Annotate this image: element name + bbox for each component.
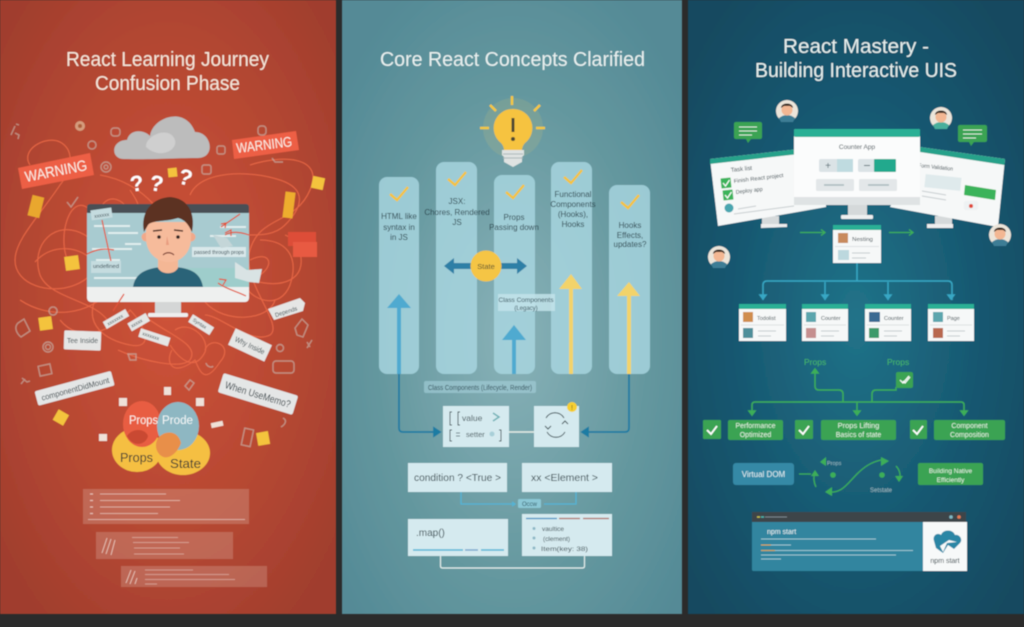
column text 4: Hooks xyxy=(562,220,584,229)
child card 3: Counter xyxy=(884,316,904,322)
sticky label 2 xyxy=(192,247,246,257)
element box: xx <Element > xyxy=(531,473,598,484)
title: react mastery: Building Interactive UIS xyxy=(755,60,957,82)
chat bubbles xyxy=(734,122,987,146)
outcome: performance: Optimized xyxy=(740,432,771,439)
code lines on screen xyxy=(92,226,246,278)
avatar top right xyxy=(930,107,952,129)
tangled red scribbles xyxy=(15,140,313,375)
outcome: props lifting: Props Lifting xyxy=(838,421,879,430)
flow lines into state box xyxy=(399,374,629,436)
label: Tee Inside: Tee Inside xyxy=(67,336,98,345)
sticky label 1: xxxxxx xyxy=(94,212,110,220)
column text 5 xyxy=(614,221,647,249)
building lists box: Efficiently xyxy=(937,477,965,484)
label: small tag 2: xxxxx xyxy=(130,318,144,329)
map box: .map() xyxy=(416,528,445,539)
props labels xyxy=(804,357,909,367)
label: small tag 3 xyxy=(138,328,171,346)
outcome: component composition: Component xyxy=(951,423,988,430)
venn diagram: props and state: Prode xyxy=(162,415,193,427)
child card 2 xyxy=(802,304,848,341)
title: concepts clarified: Core React Concepts Clarified xyxy=(380,49,645,71)
reconciliation cycle diagram xyxy=(799,457,903,496)
label: Why inside: Why Inside xyxy=(233,335,266,356)
column text 3 xyxy=(489,213,539,232)
question marks xyxy=(128,164,195,197)
column text 3: Passing down xyxy=(489,223,539,232)
title: react mastery xyxy=(755,36,957,82)
scattered icons xyxy=(11,121,312,447)
child card 2: Counter xyxy=(821,316,841,322)
column text 1: HTML like xyxy=(381,212,417,221)
label: small tag 4 xyxy=(188,314,214,335)
code block 3 xyxy=(121,566,267,587)
outcome: props lifting xyxy=(795,420,896,440)
npm start logo card: npm start xyxy=(930,558,960,565)
parent component card xyxy=(833,225,881,263)
avatar top left xyxy=(776,100,798,122)
label: small tag 1: xxxxxxx xyxy=(106,313,125,327)
center app window: counter app: + xyxy=(825,161,831,172)
list box: Item(key: 38) xyxy=(541,546,588,553)
small venn tags xyxy=(99,387,223,441)
panel: react mastery xyxy=(688,0,1024,614)
venn diagram: props and state xyxy=(112,401,210,475)
label: Tee Inside xyxy=(64,330,101,351)
concept columns xyxy=(379,162,650,374)
terminal: npm start xyxy=(752,512,966,571)
props labels: Props xyxy=(804,357,826,367)
component tree connectors xyxy=(760,263,954,300)
class components caption xyxy=(424,381,536,393)
npm start logo card xyxy=(923,522,967,571)
virtual dom box: Virtual DOM xyxy=(742,470,786,479)
chat bubble left xyxy=(734,122,762,143)
map box xyxy=(408,519,508,556)
left app window: task list xyxy=(710,146,826,228)
column text 1 xyxy=(381,212,417,242)
label: componentDidMount: componentDidMount xyxy=(40,376,111,403)
building lists box xyxy=(918,463,983,485)
child card 4 xyxy=(928,304,974,341)
icon: cloud xyxy=(114,117,210,159)
center app window: counter app: Counter App xyxy=(839,144,875,151)
red note right xyxy=(288,232,317,257)
warning sign left: WARNING xyxy=(24,157,89,186)
warning sign right: WARNING xyxy=(235,133,293,156)
right app window: notifications xyxy=(890,147,1005,228)
label: When UseMemo: When UseMemo? xyxy=(223,380,292,411)
useState box xyxy=(443,406,509,447)
confusion labels xyxy=(35,298,305,415)
column text 5: updates? xyxy=(614,240,647,249)
connector between boxes xyxy=(509,431,534,433)
avatar right xyxy=(989,224,1011,246)
column text 4: (Hooks), xyxy=(558,210,588,219)
column text 5: Hooks xyxy=(619,221,641,230)
question marks: ? xyxy=(128,170,145,197)
column text 2: JS xyxy=(452,218,462,227)
child card 1 xyxy=(739,304,786,341)
virtual dom box xyxy=(733,463,794,485)
list box xyxy=(522,514,612,556)
code block 1 xyxy=(83,489,249,524)
or label: Occw xyxy=(522,502,538,508)
panel: confusion phase xyxy=(0,0,336,614)
yellow sticky notes xyxy=(28,167,325,446)
list box: (clement) xyxy=(543,536,570,543)
props flow lines xyxy=(749,369,967,415)
outcome: component composition xyxy=(910,420,1005,440)
class components label: Class Components xyxy=(499,297,554,304)
title: confusion phase xyxy=(66,49,269,95)
question marks: ? xyxy=(176,164,195,191)
sticky label 3: undefined xyxy=(93,264,119,270)
list box: vaultice xyxy=(542,526,564,533)
terminal: npm start: npm start xyxy=(767,529,796,536)
venn diagram: props and state: Props xyxy=(120,451,153,465)
re-render cycle box xyxy=(534,402,579,447)
parent component card: Nesting xyxy=(852,237,873,243)
chat bubble right xyxy=(958,125,987,146)
outcome: props lifting: Basics of state xyxy=(836,432,881,439)
class components label: (Legacy) xyxy=(514,306,538,312)
venn diagram: props and state: State xyxy=(170,457,201,471)
paper scrap xyxy=(235,262,262,283)
building lists box: Building Native xyxy=(929,468,973,475)
column text 5: Effects, xyxy=(617,231,643,240)
title: confusion phase: Confusion Phase xyxy=(95,73,240,95)
label: small tag 1 xyxy=(103,309,129,329)
reconciliation cycle diagram: Setstate xyxy=(870,488,893,494)
bracket between map and list xyxy=(440,556,584,568)
element box xyxy=(522,463,612,492)
reconciliation cycle diagram: Props xyxy=(827,461,842,467)
sticky label 2: passed through props xyxy=(194,250,244,256)
useState box: value xyxy=(462,413,483,423)
column text 4: Components xyxy=(550,200,596,209)
column text 4 xyxy=(550,190,596,229)
right app window: notifications: Form Validation xyxy=(918,163,953,173)
props labels: Props xyxy=(887,357,909,367)
condition box: condition ? <True > xyxy=(414,473,501,484)
or label xyxy=(518,499,541,508)
child card 1: Todolist xyxy=(757,316,776,322)
label: Why inside xyxy=(228,328,272,362)
column text 1: syntax in xyxy=(383,223,415,232)
re-render cycle box: ! xyxy=(571,405,573,412)
question marks: ? xyxy=(148,170,165,197)
column text 4: Functional xyxy=(555,190,592,199)
column text 2: Chores, Rendered xyxy=(424,208,490,217)
column text 3: Props xyxy=(504,213,524,222)
outcome: component composition: Composition xyxy=(950,432,989,439)
column text 2: JSX: xyxy=(449,197,465,206)
class components label xyxy=(498,294,555,312)
venn diagram: props and state: Props xyxy=(129,415,158,427)
child cards xyxy=(739,304,974,341)
center app window: counter app xyxy=(794,129,920,219)
check marks xyxy=(390,170,639,208)
upward arrows xyxy=(387,274,640,374)
outcome: performance: Performance xyxy=(735,423,776,430)
condition box xyxy=(408,463,507,492)
child card 4: Page xyxy=(947,316,960,322)
props check icon xyxy=(896,372,913,388)
label: small tag 2 xyxy=(127,313,150,331)
class components caption: Class Components (Lifecycle, Render) xyxy=(428,385,532,392)
avatars xyxy=(708,100,1011,268)
sticky label 3 xyxy=(91,261,121,273)
column labels xyxy=(381,190,647,249)
checkbox row 1: Finish React project xyxy=(734,173,784,185)
icon: light bulb xyxy=(480,96,545,167)
monitor xyxy=(87,204,262,317)
label: Depends xyxy=(268,298,305,320)
left app window: task list: Task list xyxy=(731,166,753,174)
title: react mastery: React Mastery - xyxy=(783,36,929,58)
label: small tag 3: xxxxxxx xyxy=(141,331,160,342)
outcome: performance xyxy=(703,420,783,440)
state two-way arrow xyxy=(444,250,527,282)
checkbox row 2: Deploy app xyxy=(736,187,763,196)
label: Depends: Depends xyxy=(275,306,298,319)
panel: concepts clarified xyxy=(342,0,682,614)
child card 3 xyxy=(865,304,911,341)
confused person xyxy=(133,197,203,287)
code block 2 xyxy=(96,532,233,559)
conditional connector xyxy=(461,492,576,506)
green arrows around parent card xyxy=(800,230,913,236)
state two-way arrow: State xyxy=(477,262,495,271)
avatar left xyxy=(708,246,730,268)
title: confusion phase: React Learning Journey xyxy=(66,49,269,71)
label: small tag 4: Syntax xyxy=(191,318,208,331)
useState box: setter xyxy=(466,430,485,439)
sticky label 1 xyxy=(90,208,113,220)
column text 1: in JS xyxy=(390,233,408,242)
red arrows on screen xyxy=(87,214,249,311)
column text 2 xyxy=(424,197,490,227)
